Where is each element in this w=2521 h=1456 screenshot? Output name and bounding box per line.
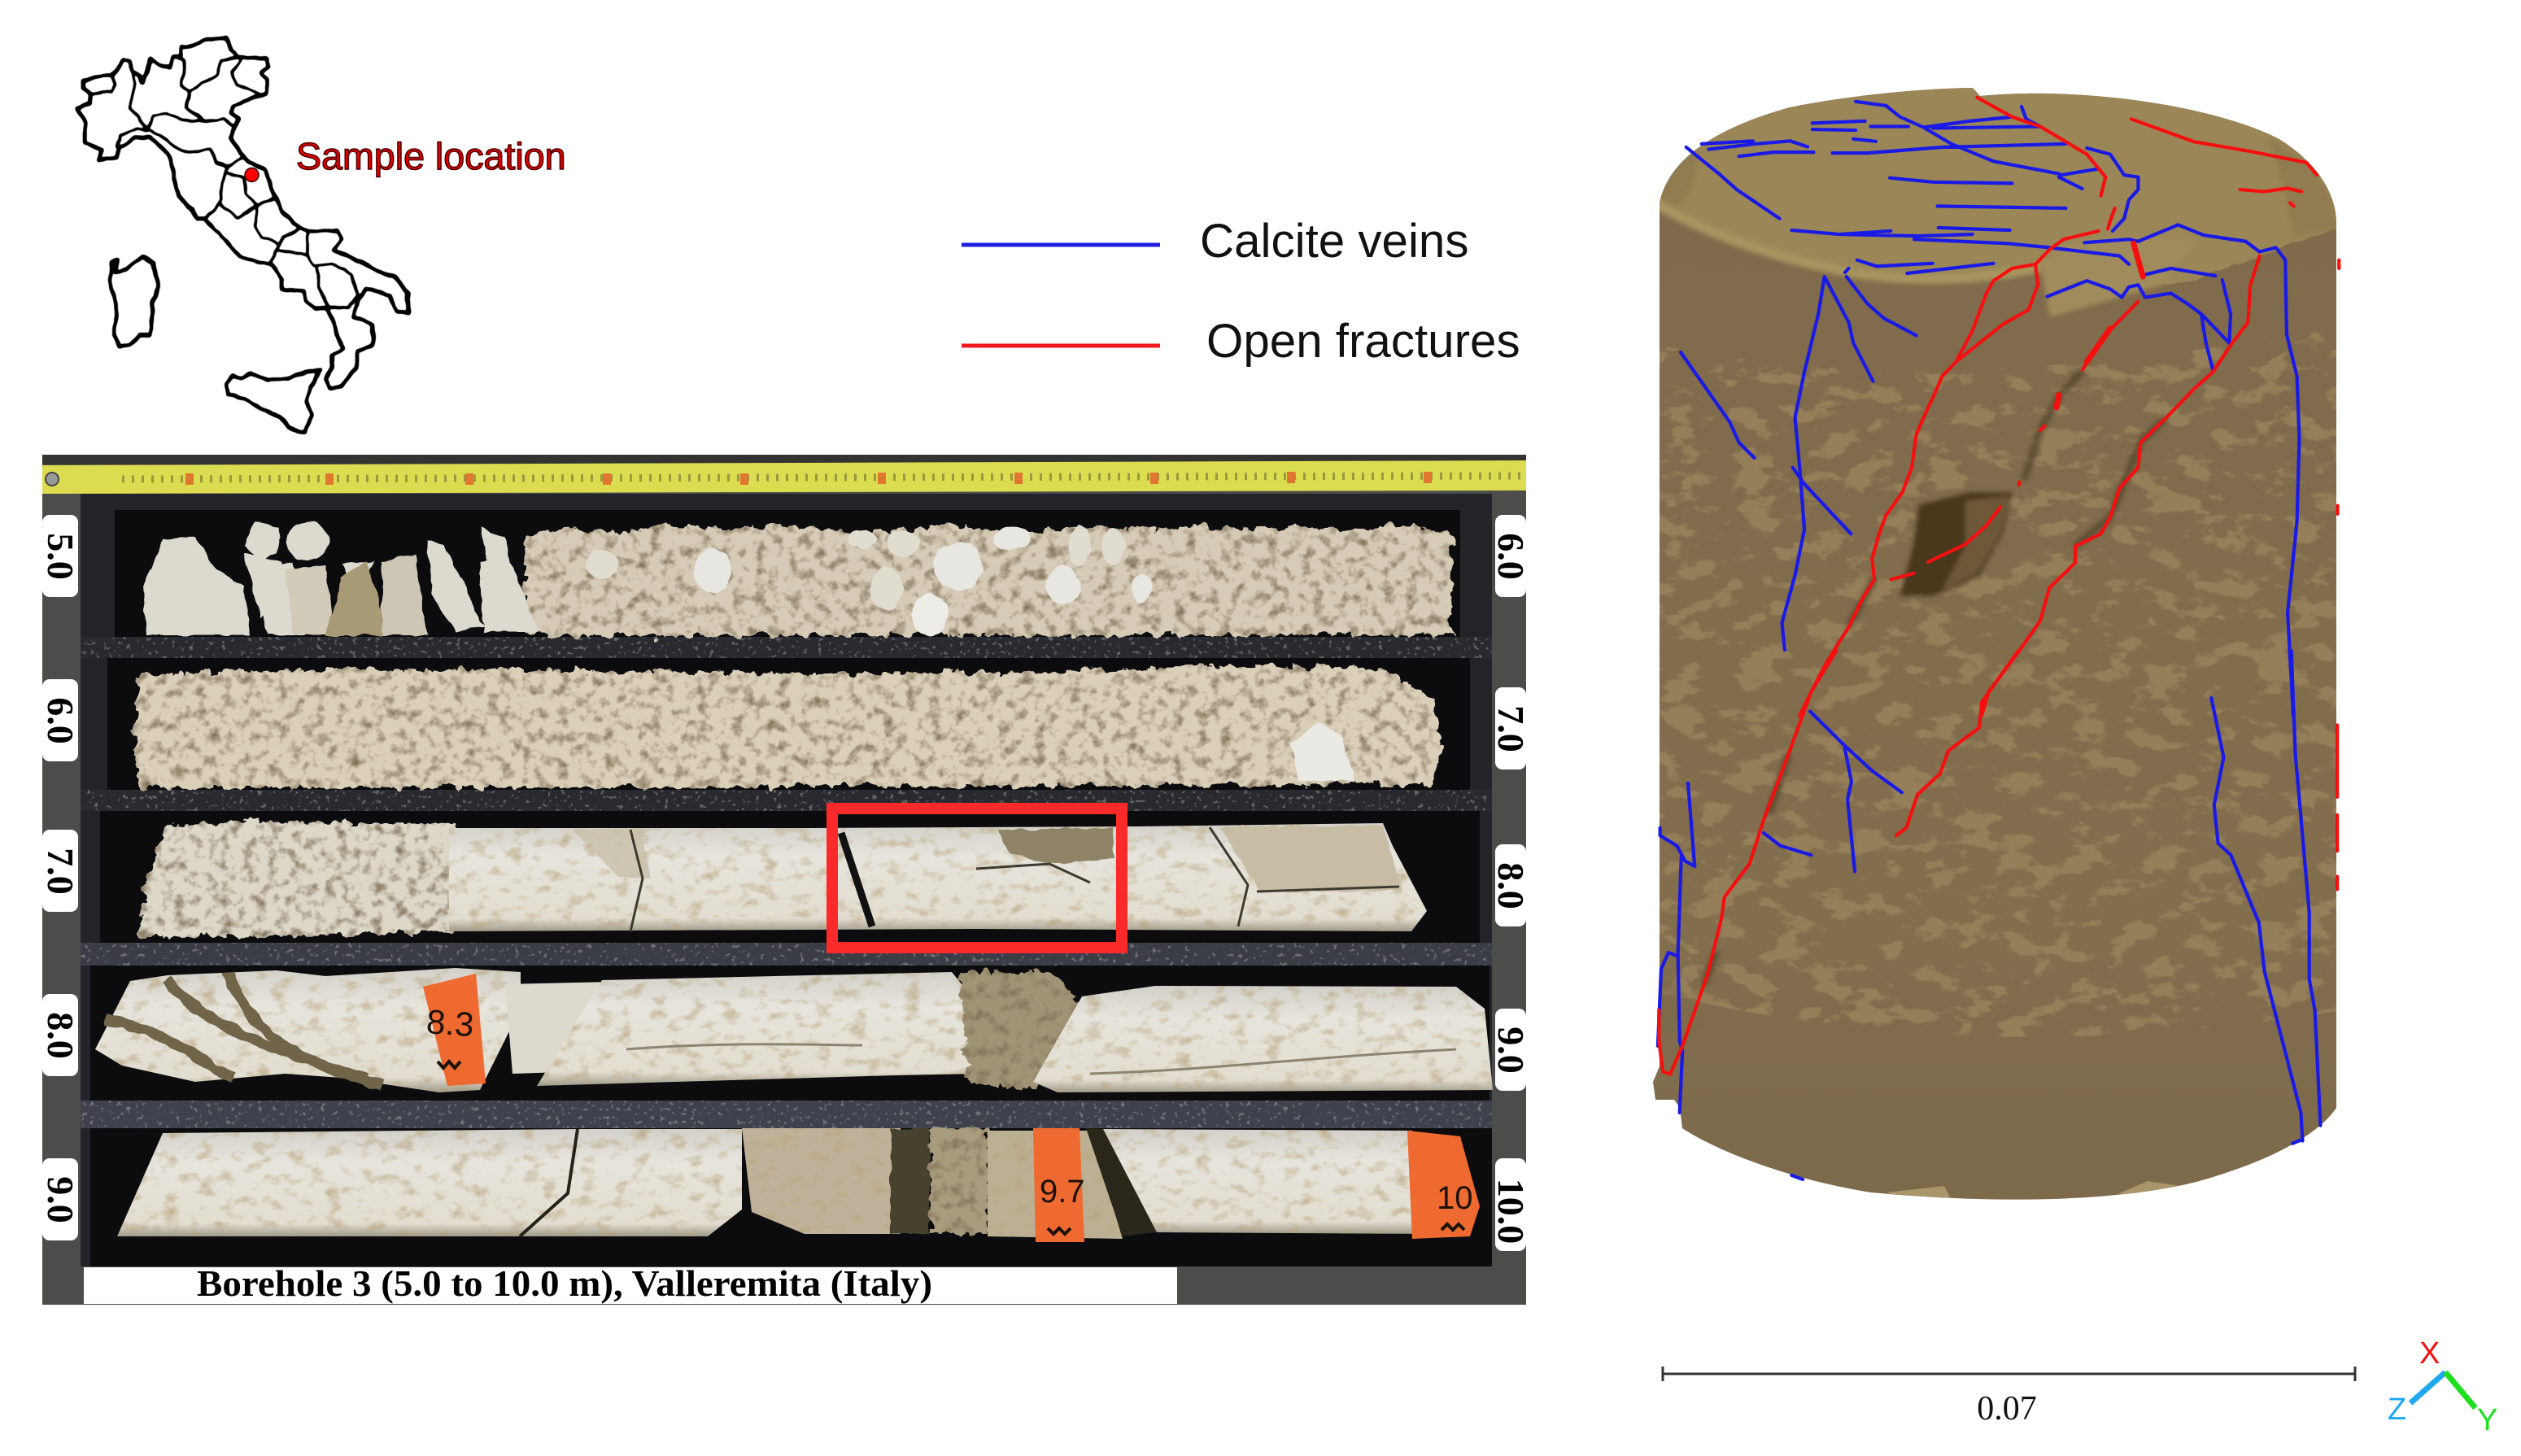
Sardinia [110, 257, 159, 347]
open fractures lower [1659, 651, 2337, 1075]
legend: calcite veins: Calcite veins [1200, 215, 1468, 268]
axis triad: X [2419, 1336, 2440, 1371]
core row 1: 5.0 to 6.0 m rubble [143, 521, 1452, 636]
core row 2: 6.0 to 7.0 m rubble [134, 665, 1442, 788]
axis triad: Z [2388, 1393, 2406, 1427]
caption: Borehole 3 (5.0 to 10.0 m), Valleremita (Italy) [197, 1262, 932, 1304]
depth tag 9.7: 9.7 [1040, 1174, 1085, 1210]
tray channels [115, 510, 1460, 637]
legend [962, 215, 1520, 368]
depth labels left: 5.0 [40, 533, 81, 580]
sample location label: Sample location [296, 135, 566, 177]
panel: core box photograph [40, 455, 1532, 1305]
calcite veins upper [1681, 102, 2299, 716]
open fractures upper [1799, 98, 2339, 716]
outer frame [42, 455, 1526, 1305]
depth tag 9.7 [1033, 1128, 1085, 1242]
core row 4: 8.0 to 9.0 m [95, 968, 1493, 1092]
fracture relief [1704, 370, 2166, 984]
depth labels left: 8.0 [40, 1012, 81, 1059]
bottom rim chips [1887, 1181, 2179, 1198]
depth labels right [1490, 515, 1532, 1251]
depth tag 8.3 [423, 974, 486, 1086]
highlight box: sampled interval [832, 809, 1122, 948]
top surface [1650, 86, 2343, 285]
sample location marker [245, 168, 259, 182]
mainland outline [78, 38, 408, 387]
core row 3: 7.0 to 8.0 m [138, 822, 1427, 937]
depth labels left: 7.0 [40, 848, 81, 895]
core row 5: 9.0 to 10.0 m [117, 1128, 1480, 1242]
depth tag 10: 10 [1437, 1180, 1472, 1216]
calcite veins lower [1658, 651, 2320, 1179]
caption [84, 1262, 1177, 1304]
3D core model [1643, 81, 2351, 1220]
axis triad: Y [2477, 1403, 2497, 1437]
axis triad [2388, 1336, 2497, 1437]
depth labels right: 10.0 [1490, 1179, 1532, 1244]
depth labels right: 6.0 [1490, 533, 1532, 580]
depth labels left: 6.0 [40, 697, 81, 744]
map of Italy [78, 38, 408, 433]
depth labels right: 9.0 [1490, 1027, 1532, 1074]
cylinder body [1643, 81, 2351, 1220]
Sicily [225, 370, 321, 433]
depth labels right: 8.0 [1490, 862, 1532, 909]
regional borders [91, 56, 358, 308]
scale bar [1663, 1367, 2355, 1428]
hole [1900, 492, 2012, 596]
depth labels left [40, 515, 81, 1240]
depth labels right: 7.0 [1490, 705, 1532, 752]
scale bar: 0.07 [1977, 1390, 2037, 1428]
legend: open fractures: Open fractures [1206, 315, 1520, 368]
measuring tape [42, 460, 1526, 494]
depth tag 8.3: 8.3 [425, 1002, 475, 1044]
depth labels left: 9.0 [40, 1176, 81, 1223]
depth tag 10 [1407, 1131, 1480, 1239]
